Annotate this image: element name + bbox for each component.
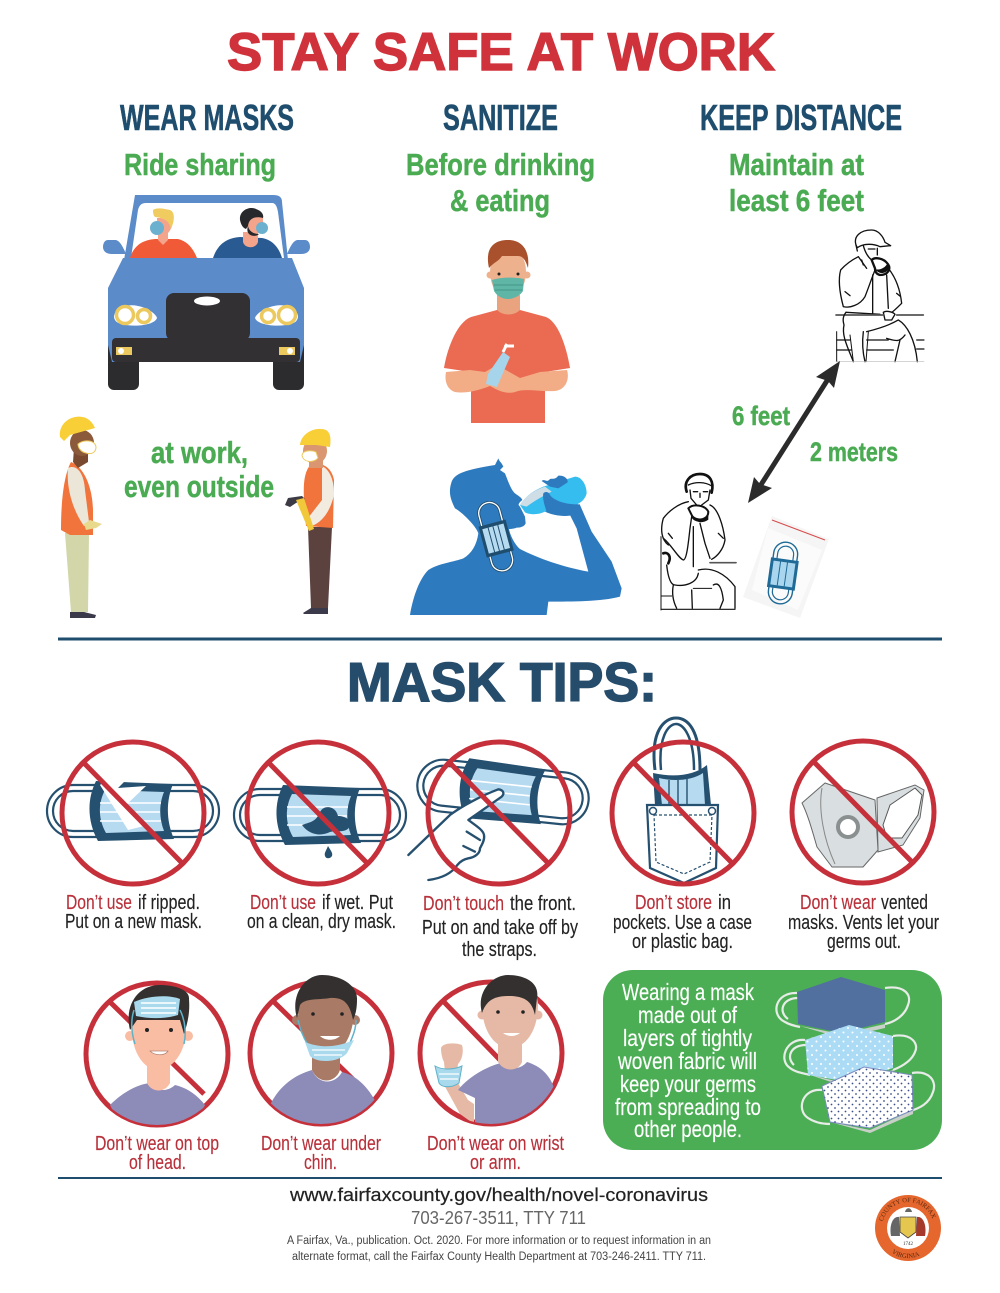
tip: mask under chin: [250, 975, 392, 1174]
illustration: seated worker, lower left: [661, 474, 736, 610]
caption: [613, 892, 752, 953]
tip: storing in pockets: [612, 718, 754, 953]
illustration: three cloth masks: [776, 977, 934, 1133]
phone: 703-267-3511, TTY 711: [411, 1208, 586, 1228]
caption: germs out.: [827, 931, 901, 953]
callout text: keep your germs: [620, 1071, 756, 1097]
icon: hand touching mask prohibited: [408, 742, 592, 884]
caption: or arm.: [470, 1152, 521, 1174]
icon: mask in pocket prohibited: [612, 718, 754, 884]
title: STAY SAFE AT WORK: [227, 23, 775, 82]
caption: [261, 1133, 381, 1174]
callout text: [615, 979, 761, 1142]
caption: if ripped.: [138, 892, 200, 914]
icon: mask on forehead prohibited: [86, 983, 228, 1135]
caption: in: [718, 892, 731, 914]
caption: if wet. Put: [322, 892, 393, 914]
label: 6 feet: 6 feet: [732, 401, 790, 431]
caption: of head.: [129, 1152, 186, 1174]
caption: [427, 1133, 564, 1174]
caption: [247, 892, 396, 933]
icon: wet mask prohibited: [234, 742, 406, 884]
tip: ripped mask: [47, 742, 219, 933]
illustration: right worker with hammer: [285, 429, 334, 614]
label: 2 meters: 2 meters: [810, 437, 898, 467]
panel: wear masks: [60, 97, 334, 618]
heading: keep distance: KEEP DISTANCE: [700, 97, 902, 138]
caption: Put on and take off by: [422, 917, 578, 939]
icon: mask on wrist prohibited: [420, 975, 562, 1127]
tip: mask on top of head: [86, 983, 228, 1174]
illustration: man with hand sanitizer: [444, 240, 570, 423]
caption: [788, 892, 939, 953]
caption: masks. Vents let your: [788, 912, 939, 934]
caption: pockets. Use a case: [613, 912, 752, 934]
caption: chin.: [304, 1152, 337, 1174]
subheading: before drinking and eating: [406, 147, 595, 218]
text: at work, even outside: even outside: [124, 469, 274, 504]
callout text: made out of: [638, 1002, 737, 1028]
panel: keep distance: [661, 97, 924, 618]
county seal: COUNTY OF FAIRFAX: [879, 1198, 936, 1221]
caption: Don’t use: [66, 892, 132, 914]
publication note: [287, 1235, 711, 1263]
caption: Don’t touch: [423, 893, 504, 915]
panel background: [603, 970, 942, 1150]
subheading: maintain at least 6 feet: [729, 147, 864, 218]
caption: Put on a new mask.: [65, 911, 202, 933]
caption: Don’t store: [635, 892, 712, 914]
icon: ripped mask prohibited: [47, 742, 219, 884]
county seal: VIRGINIA: [893, 1249, 920, 1258]
callout: fabric masks: [603, 970, 942, 1150]
caption: the front.: [510, 893, 576, 915]
illustration: seated worker, upper right: [836, 230, 924, 362]
callout text: layers of tightly: [623, 1025, 752, 1051]
illustration: car with masked passengers: [103, 195, 310, 390]
caption: [65, 892, 202, 933]
illustration: mask in plastic bag: [743, 516, 829, 618]
tip: vented masks: [788, 741, 939, 953]
callout text: woven fabric will: [617, 1048, 757, 1074]
callout text: Wearing a mask: [622, 979, 754, 1005]
subheading: before drinking and eating: Before drinking: [406, 147, 595, 182]
icon: vented mask prohibited: [792, 741, 934, 883]
publication note: alternate format, call the Fairfax County Health Department at 703-246-2411. TTY 711.: [292, 1251, 706, 1263]
footer: [287, 1185, 941, 1263]
subheading: before drinking and eating: & eating: [450, 183, 550, 218]
callout text: other people.: [634, 1116, 742, 1142]
caption: on a clean, dry mask.: [247, 911, 396, 933]
caption: the straps.: [462, 939, 537, 961]
heading: mask tips: MASK TIPS:: [347, 651, 657, 713]
callout text: from spreading to: [615, 1094, 761, 1120]
text: at work, even outside: at work,: [151, 435, 248, 470]
arrow: six feet distance: [748, 361, 840, 503]
caption: vented: [881, 892, 928, 914]
tip: mask on wrist: [420, 975, 564, 1174]
county seal: 1742: [903, 1242, 914, 1247]
tip: wet mask: [234, 742, 406, 933]
illustration: left worker: [60, 417, 102, 618]
caption: Don’t wear on wrist: [427, 1133, 564, 1155]
subheading: maintain at least 6 feet: least 6 feet: [729, 183, 864, 218]
subheading: ride sharing: Ride sharing: [124, 147, 276, 182]
publication note: A Fairfax, Va., publication. Oct. 2020. For more information or to request information in an: [287, 1235, 711, 1247]
tip: touching mask front: [408, 742, 592, 961]
panel: sanitize: [406, 97, 622, 615]
caption: or plastic bag.: [632, 931, 733, 953]
caption: [95, 1133, 219, 1174]
heading: wear masks: WEAR MASKS: [120, 97, 294, 138]
icon: mask under chin prohibited: [250, 975, 392, 1135]
caption: Don’t use: [250, 892, 316, 914]
caption: Don’t wear on top: [95, 1133, 219, 1155]
caption: Don’t wear: [800, 892, 876, 914]
caption: Don’t wear under: [261, 1133, 381, 1155]
subheading: maintain at least 6 feet: Maintain at: [729, 147, 864, 182]
text: at work, even outside: [124, 435, 274, 504]
illustration: man drinking from bottle with mask on chin: [410, 458, 622, 615]
heading: sanitize: SANITIZE: [443, 97, 558, 138]
county seal: [875, 1195, 941, 1261]
website: www.fairfaxcounty.gov/health/novel-coronavirus: [289, 1185, 708, 1205]
caption: [422, 893, 578, 961]
